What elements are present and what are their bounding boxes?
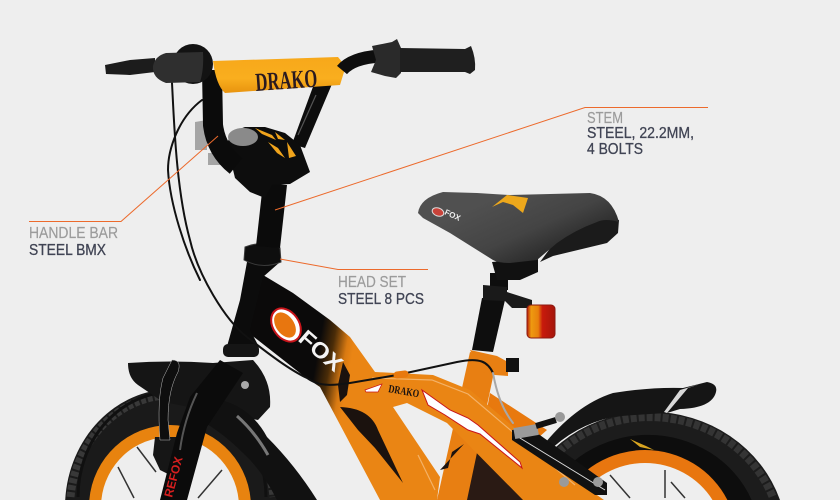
saddle mount [492, 258, 538, 280]
right flange [371, 39, 401, 78]
handle bar label: HANDLE BAR [29, 225, 118, 242]
front fork [160, 360, 243, 500]
saddle fox wordmark: FOX [443, 208, 462, 223]
bar cross brace [292, 84, 332, 148]
brake lever [105, 58, 155, 75]
head tube [226, 262, 280, 350]
rear brake arm [512, 412, 607, 495]
main frame [223, 244, 604, 500]
head set label: HEAD SET [338, 274, 406, 291]
front wheel [65, 389, 279, 500]
frame highlights [372, 378, 575, 490]
rear fender [541, 382, 716, 453]
head set spec: STEEL 8 PCS [338, 291, 424, 308]
down tube and top tube [245, 268, 604, 500]
stem chrome [228, 128, 258, 146]
seat clamp [470, 350, 508, 376]
chain guard [450, 450, 540, 500]
pad wordmark: DRAKO [254, 64, 318, 97]
lower head collar [223, 344, 259, 357]
stem tube [256, 183, 287, 248]
fork bolt [241, 381, 249, 389]
right handlebar [342, 56, 380, 70]
bolt [506, 358, 519, 372]
left flange [173, 44, 213, 84]
seat stay [485, 393, 547, 445]
fork lettering: REFOX [161, 455, 186, 499]
stem label: STEM [587, 110, 623, 127]
right grip [400, 46, 475, 74]
fox logo badge [265, 303, 307, 347]
seat tube [437, 352, 497, 500]
left handlebar riser [212, 70, 236, 166]
callout: head set [280, 259, 428, 308]
stem spec: STEEL, 22.2MM, [587, 125, 694, 142]
reflector [527, 305, 555, 338]
brake arm front [159, 360, 179, 440]
fox wordmark: FOX [294, 325, 348, 377]
front brake caliper [153, 437, 178, 477]
white and red flame decal [422, 390, 522, 468]
handlebar clamp [195, 120, 226, 165]
callout: handle bar [29, 136, 218, 259]
saddle fox logo [431, 206, 445, 218]
saddle [418, 192, 619, 263]
bar cross brace highlight [298, 95, 316, 135]
stem yellow flame [255, 128, 296, 158]
black flame decals [338, 362, 403, 483]
stem leader line [275, 108, 708, 210]
bicycle illustration [65, 39, 780, 500]
brake cables [168, 83, 513, 423]
handlebar pad [213, 57, 344, 97]
fox logo colour [270, 308, 300, 342]
stem spec second line: 4 BOLTS [587, 141, 643, 158]
head set collar [244, 244, 281, 266]
small flame decal [365, 384, 382, 392]
handle bar spec: STEEL BMX [29, 242, 106, 259]
black flame on seat tube [440, 444, 464, 470]
rear wheel [520, 412, 780, 500]
left grip [153, 52, 203, 83]
handle bar leader line [29, 136, 218, 222]
callout: stem [275, 108, 708, 210]
seat post [470, 273, 532, 376]
saddle yellow logo [492, 195, 528, 213]
front fender [128, 360, 317, 500]
head set leader line [280, 259, 428, 270]
drako frame wordmark: DRAKO [387, 383, 420, 400]
stem body [227, 127, 310, 198]
